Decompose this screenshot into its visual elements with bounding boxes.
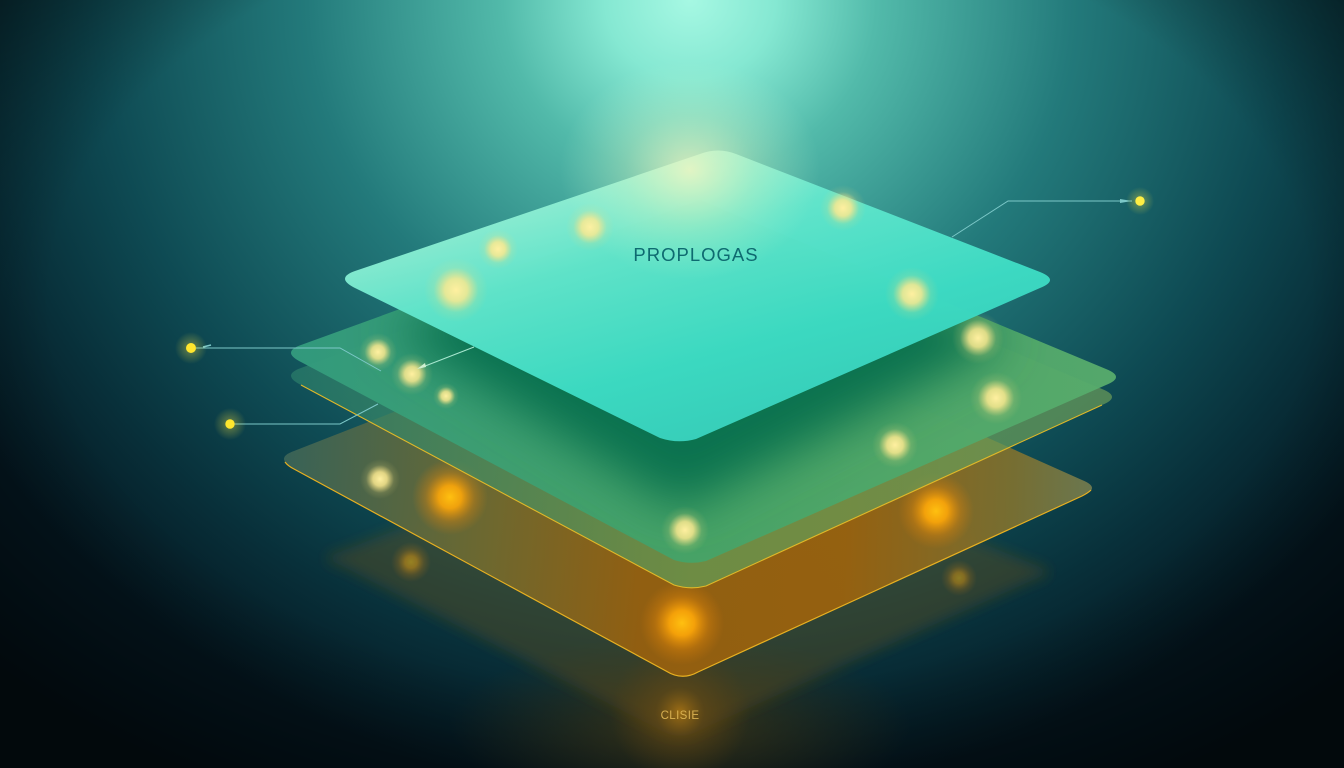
glows on green <box>359 312 1022 554</box>
node: left lower <box>214 408 246 440</box>
connector: top layer to glow <box>417 347 474 369</box>
connector: right <box>952 199 1132 237</box>
connector: left upper <box>196 345 381 371</box>
heading: PROPLOGAS <box>633 244 759 265</box>
layer: orange base <box>284 300 1092 676</box>
node: right <box>1126 187 1154 215</box>
bottom warm glow <box>440 630 920 768</box>
connector: left lower <box>234 404 378 424</box>
glow: pale on orange <box>360 459 400 499</box>
glow: orange bottom <box>640 581 724 665</box>
label: bottom: CLISIE <box>661 710 699 722</box>
node: left upper <box>175 332 207 364</box>
layer: top teal <box>345 150 1050 441</box>
glow: orange right <box>898 473 974 549</box>
light beam <box>540 50 840 290</box>
layer: lower green <box>291 220 1112 588</box>
shadow cast by top layer <box>394 311 1013 524</box>
glow: reflection bottom <box>610 642 750 768</box>
glow: orange left <box>412 459 488 535</box>
layer: upper green <box>291 310 1116 563</box>
reflection layer <box>327 420 1048 736</box>
glow: reflection left <box>391 542 431 582</box>
glow: reflection right <box>941 560 977 596</box>
glows on top <box>424 185 939 322</box>
